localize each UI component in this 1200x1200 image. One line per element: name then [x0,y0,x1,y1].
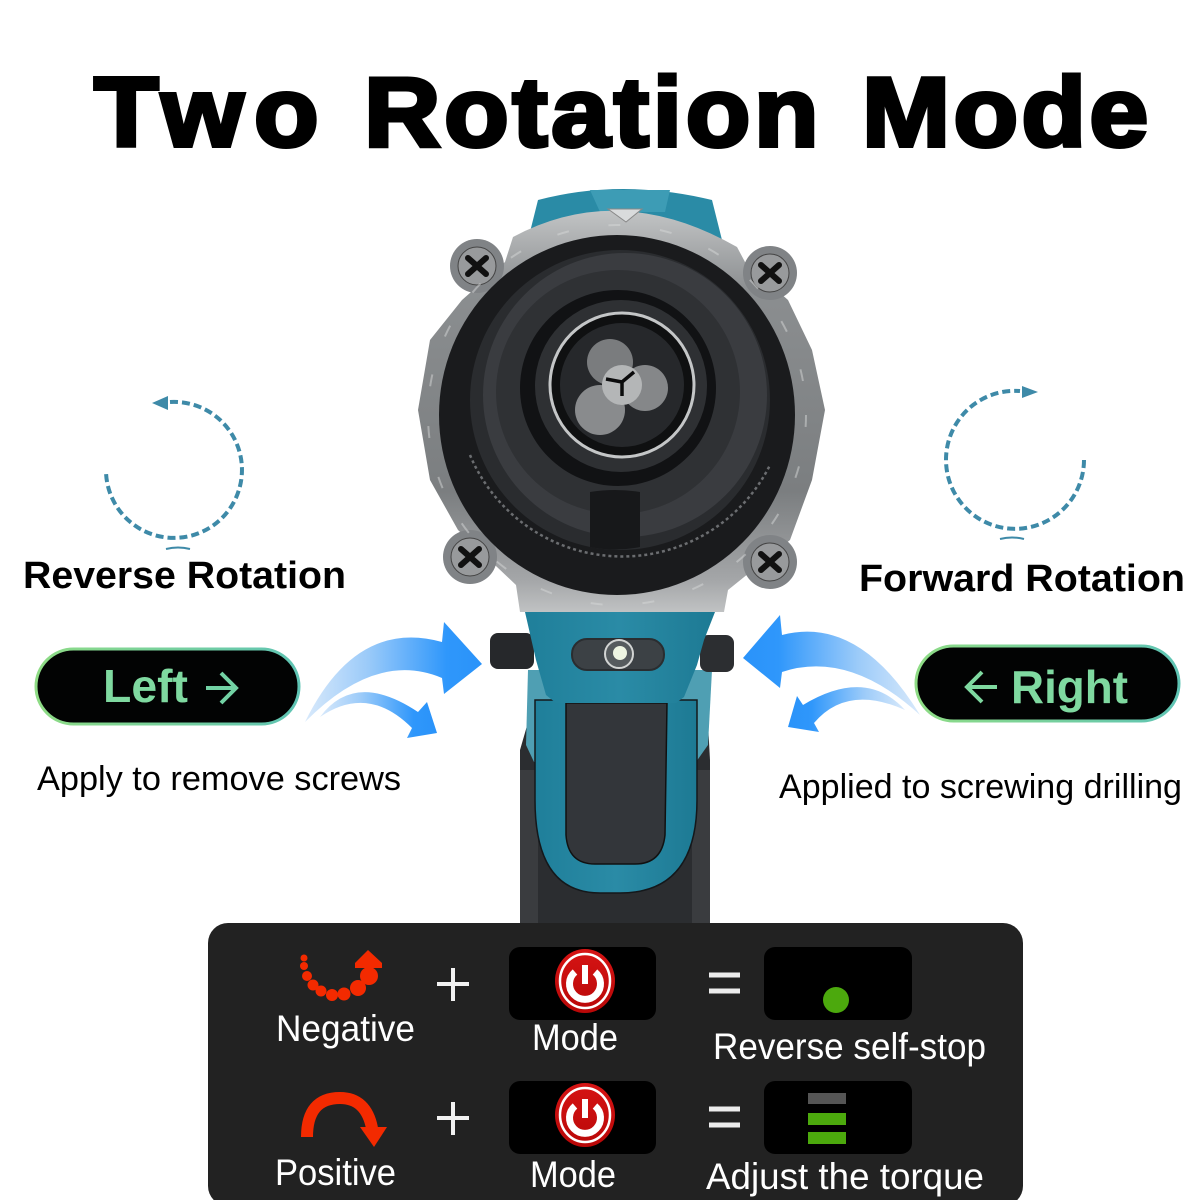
left big arrow [305,622,482,722]
control panel [208,923,1023,1200]
left button [36,649,299,724]
right big arrow [743,615,920,715]
right caption: Applied to screwing drilling [779,768,1182,806]
drill product photo [418,189,825,930]
equals sign 1 [709,975,740,991]
right switch knob [700,635,734,672]
result box 1 [764,947,912,1020]
LED lens [572,639,664,670]
negative label: Negative [276,1008,415,1049]
adjust the torque label: Adjust the torque [706,1156,984,1197]
trigger [566,703,667,864]
screws [451,247,789,581]
icon: positive rotation [307,1098,387,1147]
equals sign 2 [709,1109,740,1125]
icon: negative rotation [300,950,382,1001]
title: Two [94,58,319,167]
icon: torque bars [808,1093,846,1144]
right small arrow [788,687,905,732]
trigger guard [535,700,697,893]
screw lugs [450,239,504,293]
chuck rings [439,235,795,595]
mode box 1 [509,947,656,1020]
right button: Right [1011,661,1128,713]
mode label 1: Mode [532,1017,618,1058]
plus sign 2 [437,1102,469,1135]
icon: green dot [823,987,849,1013]
left caption: Apply to remove screws [37,760,401,798]
reverse rotation dashed arrow [106,396,242,549]
mode label 2: Mode [530,1154,616,1195]
title: Rotation [364,58,819,167]
forward rotation dashed arrow [946,386,1084,539]
left button: Left [103,660,188,712]
light teal side [526,670,712,762]
reverse rotation heading: Reverse Rotation [23,555,346,597]
icon: power button 2 [555,1083,615,1147]
silver housing [418,211,825,612]
left switch knob [490,633,534,669]
teal top collar [528,189,722,240]
forward rotation heading: Forward Rotation [859,558,1185,600]
positive label: Positive [275,1152,396,1193]
plus sign 1 [437,968,469,1001]
right button [916,646,1179,721]
drill handle body [520,705,710,930]
title: Mode [862,58,1148,167]
teal head block [525,612,715,703]
title [94,58,1148,167]
reverse self-stop label: Reverse self-stop [713,1026,986,1067]
mode box 2 [509,1081,656,1154]
left small arrow [320,692,437,738]
icon: power button 1 [555,949,615,1013]
result box 2 [764,1081,912,1154]
chuck jaws [575,339,668,435]
